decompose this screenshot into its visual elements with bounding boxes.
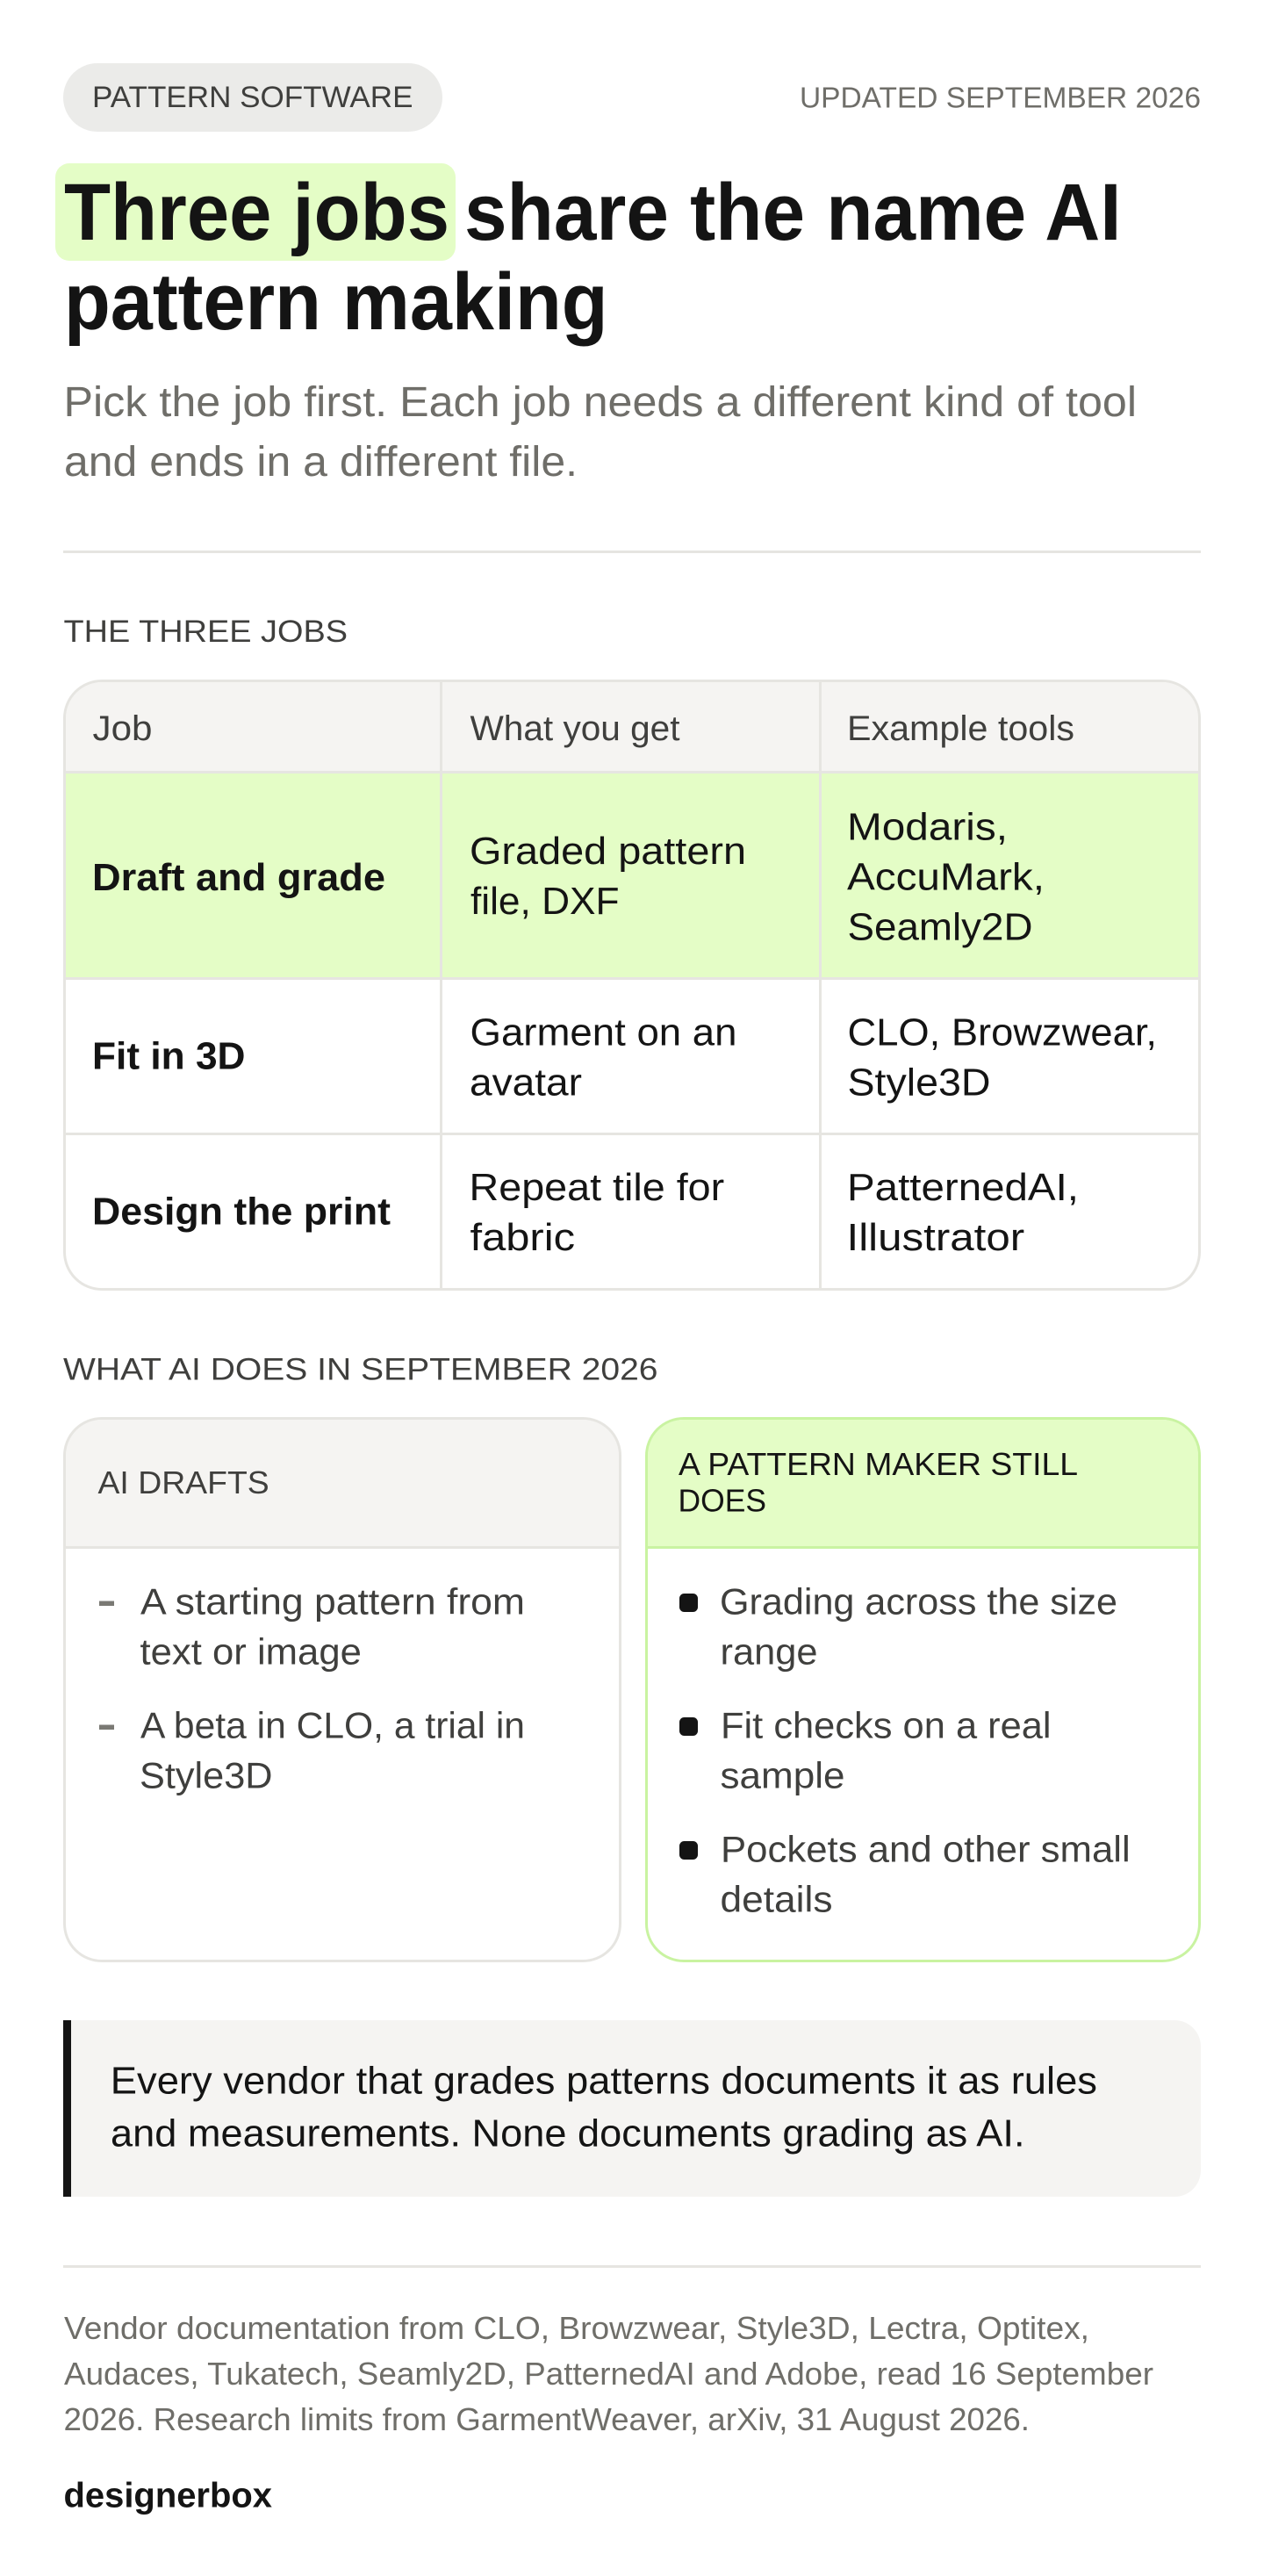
table: the three jobs — [65, 681, 1199, 1289]
panel: AI drafts — [65, 1419, 620, 1961]
row: fit in 3D: avatar — [470, 1061, 582, 1105]
title: pattern making — [64, 257, 608, 347]
sources note: 2026. Research limits from GarmentWeaver, arXiv, 31 August 2026. — [63, 2401, 1030, 2437]
category pill — [63, 63, 442, 132]
row: design the print: Illustrator — [846, 1216, 1024, 1259]
list item: details — [720, 1879, 832, 1919]
table header: Example tools — [847, 709, 1074, 748]
list item: text or image — [140, 1631, 362, 1672]
row: fit in 3D: CLO, Browzwear, — [848, 1011, 1157, 1054]
row: draft and grade: AccuMark, — [847, 855, 1045, 899]
brand name: designerbox — [63, 2476, 272, 2515]
panel heading: DOES — [678, 1482, 766, 1519]
row: draft and grade: Graded pattern — [470, 830, 746, 873]
subtitle: Pick the job first. Each job needs a different kind of tool — [63, 379, 1137, 426]
list item — [679, 1828, 1131, 1919]
updated date: UPDATED SEPTEMBER 2026 — [800, 81, 1201, 114]
sources note: Vendor documentation from CLO, Browzwear, Style3D, Lectra, Optitex, — [64, 2310, 1089, 2346]
sources note: Audaces, Tukatech, Seamly2D, PatternedAI and Adobe, read 16 September — [64, 2356, 1153, 2392]
list item: Fit checks on a real — [721, 1705, 1052, 1745]
subtitle — [63, 379, 1137, 486]
row: fit in 3D: Fit in 3D — [92, 1034, 246, 1078]
row: design the print: Repeat tile for — [469, 1166, 724, 1209]
row: design the print: PatternedAI, — [847, 1166, 1079, 1209]
list item: Grading across the size — [720, 1580, 1117, 1623]
section heading: the three jobs: THE THREE JOBS — [63, 615, 348, 649]
title highlight — [55, 163, 456, 261]
row: fit in 3D: Garment on an — [470, 1011, 737, 1054]
row: draft and grade: Modaris, — [847, 806, 1008, 848]
list item: sample — [720, 1754, 844, 1796]
row: fit in 3D: Style3D — [848, 1061, 990, 1105]
section heading: what AI does: WHAT AI DOES IN SEPTEMBER 2026 — [63, 1352, 658, 1387]
panel heading — [678, 1446, 1078, 1519]
row: design the print: fabric — [470, 1216, 575, 1259]
sources note — [63, 2310, 1153, 2437]
title — [55, 163, 1122, 347]
title: Three jobs — [64, 168, 449, 257]
panel: a pattern maker still does — [646, 1419, 1199, 1961]
list item — [99, 1705, 525, 1796]
row: draft and grade: Seamly2D — [848, 906, 1032, 948]
row: design the print — [92, 1166, 1079, 1259]
list item: A beta in CLO, a trial in — [140, 1705, 525, 1745]
list item: Pockets and other small — [721, 1828, 1131, 1870]
list item — [99, 1580, 525, 1672]
panel heading: A PATTERN MAKER STILL — [679, 1446, 1078, 1482]
row: draft and grade: file, DXF — [470, 880, 620, 923]
table header: Job — [93, 709, 153, 748]
list item: Style3D — [140, 1754, 272, 1796]
table header — [93, 709, 1074, 748]
row: fit in 3D — [92, 1011, 1157, 1105]
row: design the print: Design the print — [92, 1191, 391, 1233]
table header: What you get — [470, 709, 679, 748]
list item: A starting pattern from — [140, 1580, 525, 1623]
callout — [63, 2020, 1201, 2197]
callout: Every vendor that grades patterns documents it as rules — [111, 2060, 1097, 2102]
header row — [63, 63, 1201, 132]
list item — [679, 1580, 1117, 1672]
title: share the name AI — [464, 168, 1122, 257]
subtitle: and ends in a different file. — [64, 439, 578, 486]
list item: range — [720, 1631, 818, 1672]
panel heading: AI DRAFTS — [98, 1464, 269, 1500]
row: draft and grade — [92, 806, 1045, 948]
category pill: PATTERN SOFTWARE — [92, 81, 413, 114]
row: draft and grade: Draft and grade — [92, 856, 385, 899]
callout: and measurements. None documents grading as AI. — [111, 2112, 1025, 2155]
list item — [679, 1705, 1052, 1796]
